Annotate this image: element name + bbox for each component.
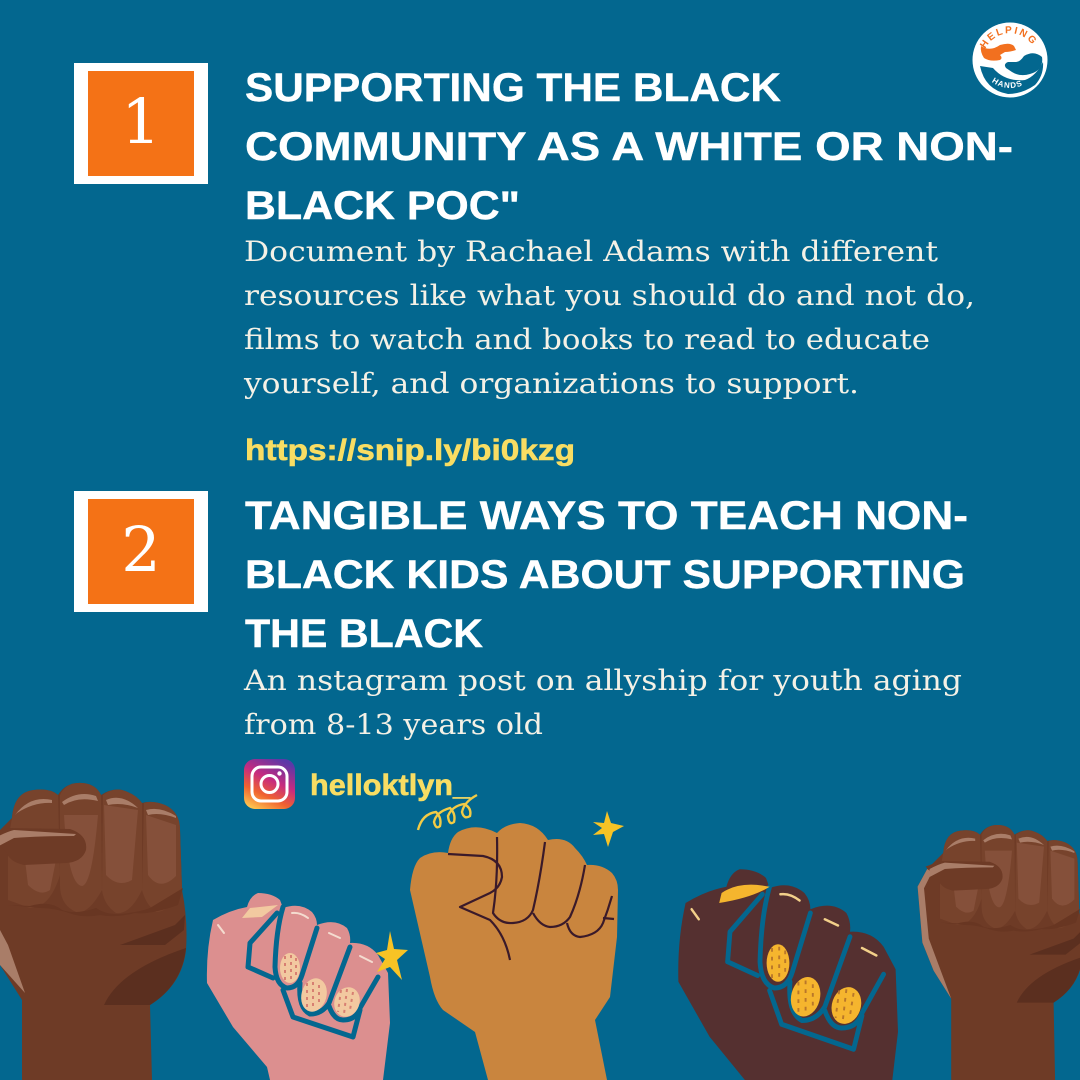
description: resource 1: films to watch and books to read to educate [244, 323, 930, 356]
left brown fist [0, 783, 186, 1080]
star above tan fist [593, 811, 624, 847]
heading: resource 2: THE BLACK [245, 612, 483, 656]
heading: resource 2: TANGIBLE WAYS TO TEACH NON- [245, 494, 968, 538]
description: resource 1: yourself, and organizations to support. [243, 367, 859, 400]
description: resource 2: from 8-13 years old [244, 708, 543, 741]
right brown fist [918, 825, 1080, 1080]
tan fist [410, 823, 618, 1080]
number badge 2 [74, 491, 208, 612]
icon: Instagram [244, 759, 295, 809]
Instagram handle: helloktlyn_ [310, 769, 470, 802]
number badge 1 [74, 63, 208, 184]
squiggle decoration [418, 795, 477, 830]
number badge 2: 2 [121, 513, 161, 586]
dark brown fist with yellow nails [678, 869, 898, 1080]
description: resource 2 [243, 664, 962, 741]
star near pink fist [376, 931, 408, 980]
heading: resource 2: BLACK KIDS ABOUT SUPPORTING [245, 553, 965, 597]
heading: resource 1: COMMUNITY AS A WHITE OR NON- [245, 125, 1013, 169]
description: resource 1 [243, 235, 975, 400]
heading: resource 1: BLACK POC" [245, 184, 520, 228]
description: resource 1: resources like what you should do and not do, [244, 279, 975, 312]
heading: resource 1: SUPPORTING THE BLACK [245, 66, 781, 110]
description: resource 1: Document by Rachael Adams with different [244, 235, 939, 268]
pink fist with nails [207, 893, 390, 1080]
number badge 1: 1 [121, 85, 161, 158]
heading: resource 1 [245, 66, 1013, 228]
heading: resource 2 [245, 494, 968, 656]
description: resource 2: An nstagram post on allyship for youth aging [243, 664, 962, 697]
logo: Helping Hands: HELPING [980, 26, 1036, 48]
logo: Helping Hands: HANDS [992, 78, 1022, 88]
link: resource 1: https://snip.ly/bi0kzg [245, 434, 575, 467]
logo: Helping Hands [972, 22, 1048, 98]
